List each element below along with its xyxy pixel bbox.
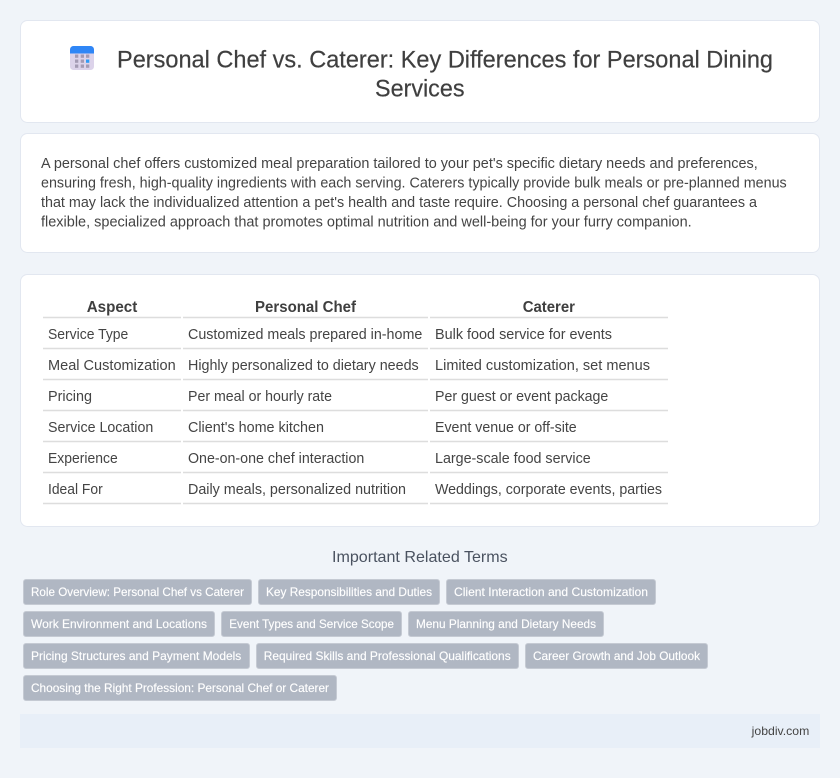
row: experience [48, 451, 591, 467]
related terms tags [24, 580, 708, 700]
tag: menu planning [408, 612, 604, 636]
tag: key responsibilities: Key Responsibilities and Duties [266, 585, 432, 599]
tag: pricing structures [24, 644, 250, 668]
row: service location: Service Location [48, 420, 153, 436]
row: ideal for [48, 482, 662, 498]
row: pricing: Per meal or hourly rate [188, 389, 332, 405]
tag: career growth [526, 644, 708, 668]
icon: calendar [70, 46, 94, 70]
row: service location: Client's home kitchen [188, 420, 324, 436]
row: service type: Customized meals prepared in-home [188, 327, 422, 343]
row: service type: Service Type [48, 327, 128, 343]
tag: event types [222, 612, 402, 636]
intro text block: ensuring fresh, high-quality ingredients with each serving. Caterers typically provide bulk meals or pre-planned menus [41, 175, 787, 191]
tag: role overview: Role Overview: Personal Chef vs Caterer [31, 585, 244, 599]
panel: comparison table [20, 274, 820, 526]
table header row: Caterer [523, 299, 575, 316]
row: meal customization: Meal Customization [48, 358, 176, 374]
tag: event types: Event Types and Service Scope [229, 617, 394, 631]
table header row [87, 299, 575, 316]
panel: header [20, 20, 820, 122]
tag: client interaction: Client Interaction and Customization [454, 585, 648, 599]
row: experience: One-on-one chef interaction [188, 451, 364, 467]
title: Personal Chef vs. Caterer: Key Differences for Personal Dining [117, 46, 773, 74]
row: ideal for: Ideal For [48, 482, 103, 498]
title: Services [375, 76, 464, 102]
footer: jobdiv.com [751, 724, 809, 738]
table header row: Personal Chef [255, 299, 357, 316]
row: ideal for: Daily meals, personalized nutrition [188, 482, 406, 498]
intro text block: that may lack the individualized attention a pet's health and taste require. Choosing a personal chef guarantees a [41, 195, 757, 211]
row: pricing: Per guest or event package [435, 389, 608, 405]
panel: introduction [20, 134, 820, 252]
tag: work environment: Work Environment and Locations [31, 617, 207, 631]
row: service type: Bulk food service for events [435, 327, 612, 343]
intro text block [41, 156, 787, 230]
row: service type [48, 327, 612, 343]
tag: required skills: Required Skills and Professional Qualifications [264, 649, 511, 663]
tag: career growth: Career Growth and Job Outlook [533, 649, 701, 663]
row: service location: Event venue or off-site [435, 420, 577, 436]
intro text block: flexible, specialized approach that promotes optimal nutrition and well-being for your furry companion. [41, 214, 692, 230]
tag: choosing the right profession: Choosing the Right Profession: Personal Chef or Caterer [31, 681, 329, 695]
table header row: Aspect [87, 299, 138, 316]
tag: required skills [256, 644, 518, 668]
tag: client interaction [446, 580, 656, 604]
row: service location [48, 420, 577, 436]
tag: pricing structures: Pricing Structures and Payment Models [31, 649, 241, 663]
heading: important related terms: Important Related Terms [332, 549, 508, 566]
row: ideal for: Weddings, corporate events, parties [435, 482, 662, 498]
intro text block: A personal chef offers customized meal preparation tailored to your pet's specific dietary needs and preferences, [41, 156, 758, 172]
footer [20, 714, 820, 748]
tag: menu planning: Menu Planning and Dietary Needs [416, 617, 596, 631]
title [117, 46, 773, 102]
tag: work environment [24, 612, 214, 636]
row: pricing [48, 389, 608, 405]
row: meal customization [48, 358, 650, 374]
row: pricing: Pricing [48, 389, 92, 405]
row: experience: Experience [48, 451, 118, 467]
row: experience: Large-scale food service [435, 451, 591, 467]
tag: key responsibilities [258, 580, 440, 604]
tag: role overview [24, 580, 252, 604]
tag: choosing the right profession [24, 676, 336, 700]
row: meal customization: Limited customization, set menus [435, 358, 650, 374]
row: meal customization: Highly personalized to dietary needs [188, 358, 419, 374]
